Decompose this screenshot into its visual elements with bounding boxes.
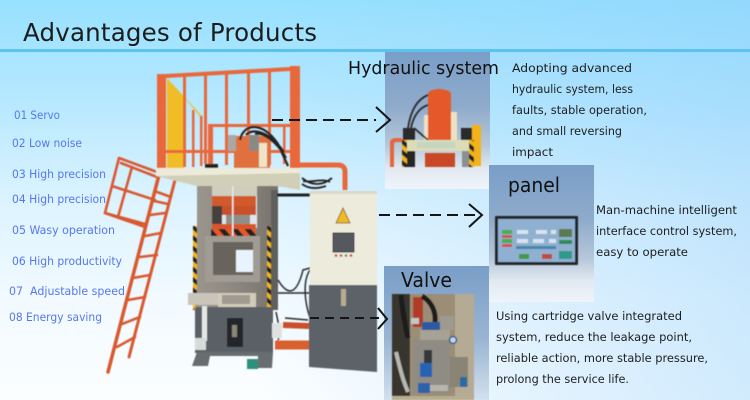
list of advantages — [9, 108, 125, 324]
cabinet screen — [333, 233, 354, 252]
valve description: system, reduce the leakage point, — [496, 330, 692, 344]
valve photo — [392, 294, 474, 400]
hydraulic unit photo — [390, 89, 481, 167]
advantage 07: 07 Adjustable speed — [9, 284, 125, 298]
hoses and connecting pipes — [272, 178, 332, 345]
valve description: reliable action, more stable pressure, — [496, 351, 708, 365]
arrow to valve — [310, 308, 387, 329]
panel: valve — [384, 266, 489, 400]
hydraulic description: faults, stable operation, — [512, 103, 647, 117]
valve description — [496, 309, 708, 386]
title rule — [0, 49, 750, 52]
press frame — [193, 186, 278, 312]
platform — [156, 168, 300, 190]
oil pipe — [300, 165, 345, 190]
yellow guard panel — [167, 78, 202, 168]
advantage 01: 01 Servo — [14, 108, 60, 122]
panel description: interface control system, — [596, 224, 737, 238]
access ladder — [105, 158, 175, 372]
advantage 03: 03 High precision — [12, 167, 106, 181]
advantage 05: 05 Wasy operation — [12, 223, 115, 237]
control cabinet — [309, 191, 377, 372]
press base — [192, 306, 273, 369]
hydraulic heading: Hydraulic system — [348, 58, 499, 79]
touchscreen photo — [495, 216, 578, 265]
panel description: Man-machine intelligent — [596, 203, 737, 217]
power unit on top — [205, 127, 288, 168]
arrow to panel — [379, 204, 482, 227]
hydraulic description: hydraulic system, less — [512, 82, 633, 96]
cabinet buttons — [335, 254, 352, 257]
hydraulic description: impact — [512, 145, 554, 159]
warning sign — [336, 208, 350, 223]
advantage 08: 08 Energy saving — [9, 310, 102, 324]
arrow to hydraulic system — [272, 107, 390, 132]
title: Advantages of Products — [23, 18, 317, 47]
advantage 02: 02 Low noise — [12, 136, 82, 150]
hydraulic description: and small reversing — [512, 124, 622, 138]
panel: hydraulic system — [348, 52, 499, 189]
valve description: Using cartridge valve integrated — [496, 309, 682, 323]
advantage 04: 04 High precision — [12, 192, 106, 206]
hydraulic press machine — [105, 66, 377, 372]
hydraulic description — [512, 61, 647, 159]
panel heading: panel — [508, 173, 560, 197]
advantage 06: 06 High productivity — [12, 254, 122, 268]
top railing — [157, 66, 300, 170]
hydraulic description: Adopting advanced — [512, 61, 632, 75]
valve description: prolong the service life. — [496, 372, 629, 386]
press table — [188, 293, 256, 307]
panel description: easy to operate — [596, 245, 688, 259]
panel description — [596, 203, 737, 259]
panel: control panel — [489, 165, 594, 302]
valve heading: Valve — [401, 268, 452, 292]
